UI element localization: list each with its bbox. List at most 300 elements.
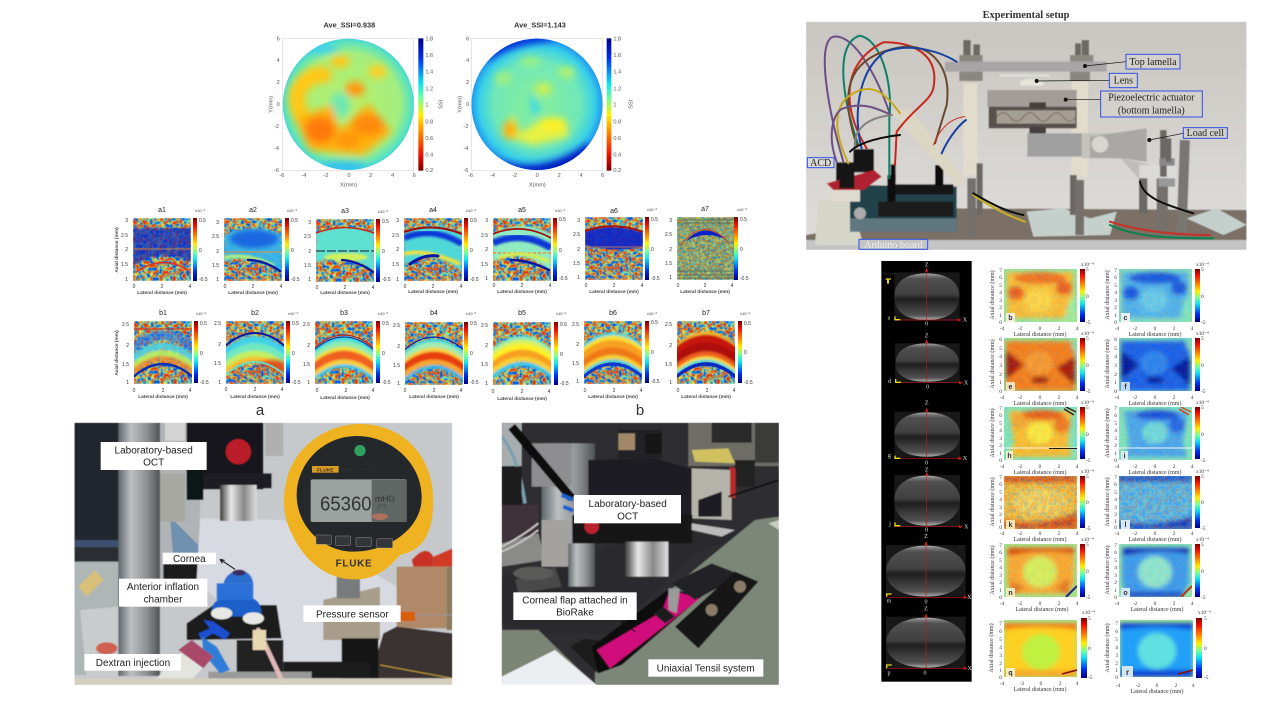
chart: strain map h: 2 xyxy=(1058,464,1061,470)
chart: strain map l: 4 xyxy=(1191,531,1194,537)
chart: b3 strain map: x10⁻³ xyxy=(378,311,389,316)
chart: strain map b: 1 xyxy=(999,313,1002,319)
chart: strain map i: 2 xyxy=(1114,443,1117,449)
chart: a1 strain map: 1 xyxy=(125,277,128,283)
chart: strain map n: 2 xyxy=(999,580,1002,586)
chart: a6 strain map: 0 xyxy=(585,283,588,289)
chart: a3 strain map: 2 xyxy=(344,285,347,291)
chart: strain map r: 4 xyxy=(1115,645,1118,651)
chart: a7 strain map: 0 xyxy=(740,247,743,253)
axis labels: left SSI: -4 xyxy=(274,146,279,152)
callout: Anterior inflation chamber: Anterior inflation xyxy=(127,582,199,593)
chart: strain map e: 1 xyxy=(999,380,1002,386)
chart: strain map i: 0 xyxy=(1114,458,1117,464)
chart: strain map h: 6 xyxy=(999,413,1002,419)
chart: a6 strain map: 0 xyxy=(651,247,654,253)
axis labels: right SSI: -2 xyxy=(512,173,517,179)
chart: b7 strain map: x10⁻³ xyxy=(740,311,751,316)
callout: Corneal flap attached in BioRake: Corneal flap attached in xyxy=(522,596,628,607)
chart: strain map k: 4 xyxy=(1076,531,1079,537)
chart: strain map i: 7 xyxy=(1114,406,1117,412)
chart: b6 strain map: b6 xyxy=(609,310,617,317)
icon: gauge: ENTER xyxy=(379,542,391,546)
chart: strain map f: 0 xyxy=(1154,395,1157,401)
arrow: corneal flap pointer xyxy=(621,621,635,632)
chart: b1 strain map: Axial distance (mm) xyxy=(114,330,120,376)
chart: b3 strain map: 4 xyxy=(372,388,375,394)
image: OCT m: 0 xyxy=(924,599,927,605)
chart: strain map q: 0 xyxy=(1088,646,1091,652)
chart: strain map o xyxy=(1104,537,1209,613)
arrow: cornea pointer xyxy=(220,559,235,569)
axis labels: left SSI: 2 xyxy=(277,80,280,86)
chart: b7 strain map: 2 xyxy=(669,343,672,349)
axis labels: right SSI: 0.2 xyxy=(613,168,621,174)
chart: a5 strain map: -0.5 xyxy=(559,276,568,282)
callout: Dextran injection xyxy=(84,654,181,671)
chart: a3 strain map: 2 xyxy=(308,249,311,255)
axis labels: right SSI: -4 xyxy=(490,173,495,179)
callout: ACD: ACD xyxy=(810,158,831,169)
chart: strain map l: Axial distance (mm) xyxy=(1104,477,1111,527)
chart: b7 strain map: 2 xyxy=(706,388,709,394)
axis labels: right SSI: 0 xyxy=(466,102,469,108)
chart: b3 strain map: 0 xyxy=(316,388,319,394)
chart: strain map l: 0 xyxy=(1114,525,1117,531)
chart: a3 strain map: 2.5 xyxy=(304,234,311,240)
chart: strain map r xyxy=(1104,610,1211,695)
chart: right SSI map xyxy=(471,38,603,171)
chart: strain map f: 0 xyxy=(1114,389,1117,395)
chart: a1 strain map: 0 xyxy=(133,284,136,290)
callout: Uniaxial Tensil system: Uniaxial Tensil system xyxy=(657,664,755,675)
chart: strain map n: 4 xyxy=(999,565,1002,571)
chart: b1 strain map: 1 xyxy=(126,380,129,386)
image: OCT d: X xyxy=(964,380,969,386)
chart: strain map c: 6 xyxy=(1114,275,1117,281)
image: OCT j: 0 xyxy=(925,528,928,534)
chart: strain map f: 0 xyxy=(1201,363,1204,369)
chart: strain map f: 6 xyxy=(1114,337,1117,343)
axis labels: left SSI: -2 xyxy=(274,124,279,130)
chart: a6 strain map: 4 xyxy=(641,283,644,289)
chart: strain map b: 7 xyxy=(999,268,1002,274)
chart: a5 strain map: 2 xyxy=(485,247,488,253)
chart: strain map b: -4 xyxy=(1000,326,1005,332)
chart: strain map o: 1 xyxy=(1114,588,1117,594)
chart: strain map o: 4 xyxy=(1114,565,1117,571)
chart: strain map i: 2 xyxy=(1173,464,1176,470)
image: OCT a: X xyxy=(963,317,968,323)
image: OCT g: g xyxy=(888,453,891,459)
chart: a1 strain map: Axial distance (mm) xyxy=(114,227,120,273)
chart: b5 strain map: Lateral distance (mm) xyxy=(497,396,547,402)
chart: strain map i: -2 xyxy=(1133,464,1138,470)
icon: gauge xyxy=(284,424,433,579)
chart: strain map r: -5 xyxy=(1204,675,1209,681)
chart: a2 strain map xyxy=(212,207,300,296)
axis labels: right SSI: 6 xyxy=(466,36,469,42)
chart: strain map f: 4 xyxy=(1114,354,1117,360)
axis labels: right SSI: 1.2 xyxy=(613,86,621,92)
axis labels: left SSI: X(mm) xyxy=(340,182,357,188)
chart: strain map c: 2 xyxy=(1173,326,1176,332)
chart: strain map c: 2 xyxy=(1114,305,1117,311)
image: OCT m: X xyxy=(967,595,972,601)
chart: b7 strain map: Lateral distance (mm) xyxy=(681,394,731,400)
callout: Piezoelectric actuator: (bottom lamella) xyxy=(1118,105,1185,116)
callout: Anterior inflation chamber xyxy=(119,579,207,607)
callout: Dextran injection: Dextran injection xyxy=(96,658,170,669)
chart: b4 strain map: -0.5 xyxy=(470,380,479,386)
icon: gauge: FLUKE xyxy=(336,559,372,570)
chart: b3 strain map: 1.5 xyxy=(303,362,310,368)
chart: b1 strain map xyxy=(114,310,209,400)
chart: a4 strain map: 0 xyxy=(404,284,407,290)
chart: a1 strain map: 2.5 xyxy=(121,233,128,239)
chart: a3 strain map: 0.5 xyxy=(382,219,389,225)
callout: Lens: Lens xyxy=(1114,76,1133,87)
chart: strain map b: Axial distance (mm) xyxy=(989,270,996,320)
chart: strain map c: 5 xyxy=(1201,267,1204,273)
chart: b7 strain map xyxy=(665,310,753,400)
chart: strain map q: 3 xyxy=(999,653,1002,659)
chart: b2 strain map: -0.5 xyxy=(292,380,301,386)
chart: strain map l: 2 xyxy=(1173,531,1176,537)
chart: strain map c: 3 xyxy=(1114,298,1117,304)
chart: strain map r: 0 xyxy=(1204,646,1207,652)
image: OCT p: 0 xyxy=(923,670,926,676)
chart: strain map r: 5 xyxy=(1204,616,1207,622)
chart: strain map f: -4 xyxy=(1115,395,1120,401)
chart: strain map o: Lateral distance (mm) xyxy=(1131,606,1183,613)
chart: strain map i: i xyxy=(1124,453,1126,460)
chart: strain map e: x10⁻⁴ xyxy=(1081,331,1094,337)
chart: a1 strain map: 4 xyxy=(189,284,192,290)
chart: b7 strain map: 2.5 xyxy=(665,322,672,328)
chart: a5 strain map: 1 xyxy=(485,276,488,282)
icon: gauge: CONFIG xyxy=(357,540,371,544)
callout: Laboratory-based OCT xyxy=(574,495,681,523)
chart: strain map b: 0 xyxy=(999,320,1002,326)
chart: strain map l: 6 xyxy=(1114,482,1117,488)
chart: a3 strain map: -0.5 xyxy=(382,277,391,283)
chart: strain map i: -5 xyxy=(1201,458,1206,464)
chart: a2 strain map: 1.5 xyxy=(212,263,219,269)
chart: a4 strain map: 3 xyxy=(396,218,399,224)
chart: strain map n: x10⁻⁴ xyxy=(1081,537,1094,543)
chart: a7 strain map: -0.5 xyxy=(740,276,749,282)
chart: a7 strain map: 0 xyxy=(677,283,680,289)
image: OCT m xyxy=(886,534,972,605)
chart: strain map c: 5 xyxy=(1114,283,1117,289)
chart: strain map h: -5 xyxy=(1086,458,1091,464)
heading: Experimental setup: Experimental setup xyxy=(983,10,1070,21)
chart: strain map f: f xyxy=(1124,384,1127,391)
chart: b6 strain map: Lateral distance (mm) xyxy=(588,394,638,400)
chart: strain map b: 2 xyxy=(1058,326,1061,332)
image: OCT g: X xyxy=(963,456,968,462)
chart: b2 strain map: x10⁻³ xyxy=(288,311,299,316)
chart: strain map n: Lateral distance (mm) xyxy=(1016,606,1068,613)
axis labels: right SSI: X(mm) xyxy=(529,182,546,188)
chart: strain map o: 5 xyxy=(1114,558,1117,564)
chart: strain map r: 7 xyxy=(1115,621,1118,627)
chart: b3 strain map: Lateral distance (mm) xyxy=(320,395,370,401)
chart: strain map k: 0 xyxy=(999,525,1002,531)
chart: strain map n: 7 xyxy=(999,543,1002,549)
chart: strain map b: 5 xyxy=(999,283,1002,289)
chart: strain map r: 3 xyxy=(1115,653,1118,659)
chart: strain map r: 6 xyxy=(1115,629,1118,635)
chart: strain map i: 0 xyxy=(1154,464,1157,470)
chart: strain map o: -4 xyxy=(1115,601,1120,607)
heading: left SSI average: Ave_SSI=0.938 xyxy=(323,21,375,30)
chart: strain map f: 5 xyxy=(1201,336,1204,342)
icon: jumper wires xyxy=(825,36,1213,238)
axis labels: left SSI: 0 xyxy=(347,173,350,179)
chart: strain map k: 3 xyxy=(999,505,1002,511)
chart: strain map b: Lateral distance (mm) xyxy=(1014,331,1066,338)
chart: strain map l: 5 xyxy=(1201,474,1204,480)
chart: strain map f: -2 xyxy=(1133,395,1138,401)
image: OCT p: X xyxy=(968,666,973,672)
chart: strain map i: 5 xyxy=(1201,405,1204,411)
chart: b5 strain map xyxy=(481,310,569,402)
axis labels: right SSI: 6 xyxy=(601,173,604,179)
chart: a7 strain map: 2.5 xyxy=(665,232,672,238)
axis labels: left SSI xyxy=(268,36,444,188)
axis labels: left SSI: 4 xyxy=(391,173,394,179)
chart: strain map q: 1 xyxy=(999,668,1002,674)
chart: b1 strain map: 0 xyxy=(133,388,136,394)
chart: a5 strain map: 0 xyxy=(559,248,562,254)
image: OCT j: j xyxy=(888,522,891,528)
chart: b1 strain map: b1 xyxy=(159,310,167,317)
chart: strain map b: 0 xyxy=(1039,326,1042,332)
chart: a6 strain map: 3 xyxy=(577,218,580,224)
chart: strain map c: 0 xyxy=(1154,326,1157,332)
chart: strain map c: 7 xyxy=(1114,268,1117,274)
chart: strain map b xyxy=(989,262,1094,338)
chart: strain map q: 4 xyxy=(1076,681,1079,687)
chart: strain map l: 0 xyxy=(1201,500,1204,506)
axis labels: left SSI: 0.2 xyxy=(425,168,433,174)
axis labels: left SSI: -6 xyxy=(274,168,279,174)
chart: strain map o: o xyxy=(1123,590,1128,597)
chart: strain map q: 0 xyxy=(999,675,1002,681)
chart: strain map l: -2 xyxy=(1133,531,1138,537)
chart: strain map q: 0 xyxy=(1040,681,1043,687)
chart: b1 strain map: -0.5 xyxy=(200,380,209,386)
callout: Uniaxial Tensil system xyxy=(648,659,763,677)
axis labels: left SSI: 4 xyxy=(277,58,280,64)
callout: Corneal flap attached in BioRake: BioRake xyxy=(556,608,594,619)
chart: a3 strain map: x10⁻³ xyxy=(378,209,389,214)
chart: strain map l: -5 xyxy=(1201,526,1206,532)
chart: strain map k: 2 xyxy=(1058,531,1061,537)
chart: strain map e xyxy=(989,331,1094,407)
chart: strain map h: 5 xyxy=(999,421,1002,427)
chart: strain map e: -2 xyxy=(1018,395,1023,401)
axis labels: left SSI: 1 xyxy=(425,103,428,109)
chart: b3 strain map: 2 xyxy=(345,388,348,394)
chart: strain map c: -4 xyxy=(1115,326,1120,332)
axis labels: left SSI: 0 xyxy=(277,102,280,108)
chart: a6 strain map: 1 xyxy=(577,275,580,281)
image: OCT j xyxy=(888,468,969,534)
chart: strain map h: 0 xyxy=(999,458,1002,464)
chart: strain map b: 5 xyxy=(1086,267,1089,273)
chart: strain map l: x10⁻⁴ xyxy=(1196,469,1209,475)
chart: b3 strain map: 0 xyxy=(382,351,385,357)
chart: strain map q: 6 xyxy=(999,629,1002,635)
chart: a5 strain map: 0.5 xyxy=(559,217,566,223)
chart: a6 strain map: -0.5 xyxy=(651,276,660,282)
chart: strain map o: 3 xyxy=(1114,573,1117,579)
chart: a1 strain map: -0.5 xyxy=(199,277,208,283)
chart: a6 strain map: Lateral distance (mm) xyxy=(589,289,639,295)
chart: b4 strain map: 4 xyxy=(460,388,463,394)
chart: b6 strain map: 1.5 xyxy=(572,361,579,367)
chart: b7 strain map: 4 xyxy=(733,388,736,394)
axis labels: right SSI: 4 xyxy=(466,58,469,64)
chart: a1 strain map: 3 xyxy=(125,218,128,224)
chart: b2 strain map: 4 xyxy=(281,387,284,393)
chart: a4 strain map: 4 xyxy=(460,284,463,290)
chart: a1 strain map: 0.5 xyxy=(199,218,206,224)
chart: a6 strain map: 2 xyxy=(577,247,580,253)
chart: strain map e: 3 xyxy=(999,363,1002,369)
chart: strain map b: 4 xyxy=(1076,326,1079,332)
callout: Laboratory-based OCT: OCT xyxy=(617,511,638,522)
axis labels: left SSI: 2 xyxy=(369,173,372,179)
chart: b2 strain map: b2 xyxy=(251,310,259,317)
image: OCT p: Z xyxy=(924,606,928,612)
chart: b5 strain map: 0 xyxy=(492,389,495,395)
chart: a5 strain map: a5 xyxy=(518,207,526,214)
chart: strain map e: -4 xyxy=(1000,395,1005,401)
chart: strain map b: -2 xyxy=(1018,326,1023,332)
chart: a7 strain map: 1 xyxy=(669,275,672,281)
chart: strain map q: 5 xyxy=(1088,616,1091,622)
callout: Laboratory-based OCT xyxy=(101,442,207,470)
chart: b1 strain map: 0.5 xyxy=(200,321,207,327)
chart: b2 strain map: 0.5 xyxy=(292,321,299,327)
chart: a2 strain map: 1 xyxy=(216,277,219,283)
chart: a7 strain map xyxy=(665,206,749,295)
chart: b2 strain map: 1.5 xyxy=(214,361,221,367)
chart: strain map b: 0 xyxy=(1086,294,1089,300)
chart: b7 strain map: 1.5 xyxy=(665,362,672,368)
chart: strain map q: 7 xyxy=(999,621,1002,627)
chart: a6 strain map: a6 xyxy=(610,208,618,215)
chart: a2 strain map: 3 xyxy=(216,220,219,226)
chart: b5 strain map: 2 xyxy=(521,389,524,395)
image: OCT p: p xyxy=(887,670,890,676)
image: OCT p xyxy=(886,606,973,676)
chart: strain map o: 7 xyxy=(1114,543,1117,549)
chart: strain map c: 4 xyxy=(1114,290,1117,296)
axis labels: right SSI: 2 xyxy=(558,173,561,179)
axis labels: left SSI: 6 xyxy=(277,36,280,42)
chart: strain map e: -5 xyxy=(1086,389,1091,395)
chart: strain map c: c xyxy=(1124,315,1128,322)
chart: a4 strain map: 2.5 xyxy=(392,233,399,239)
chart: a2 strain map: Lateral distance (mm) xyxy=(228,290,278,296)
panel: OCT lens images column xyxy=(881,261,973,682)
chart: strain map l: 0 xyxy=(1154,531,1157,537)
icon: gauge: MIN xyxy=(340,539,347,543)
callout: Laboratory-based OCT: Laboratory-based xyxy=(115,446,193,457)
chart: strain map k: Axial distance (mm) xyxy=(989,477,996,527)
image: OCT d: d xyxy=(888,379,891,385)
chart: strain map c: 1 xyxy=(1114,313,1117,319)
caption: b: b xyxy=(636,402,644,419)
chart: a4 strain map xyxy=(392,207,479,295)
chart: b5 strain map: 1 xyxy=(485,381,488,387)
chart: strain map l: 7 xyxy=(1114,475,1117,481)
chart: b7 strain map: 0.5 xyxy=(744,321,751,327)
chart: a6 strain map: 1.5 xyxy=(573,261,580,267)
chart: strain map c: Axial distance (mm) xyxy=(1104,270,1111,320)
photo scene: stretcher rig xyxy=(806,22,1247,250)
chart: a5 strain map: 1.5 xyxy=(481,262,488,268)
image: OCT a: Z xyxy=(925,263,929,269)
chart: strain map c: -2 xyxy=(1133,326,1138,332)
chart: a7 strain map: 1.5 xyxy=(665,261,672,267)
chart: strain map r: x10⁻⁴ xyxy=(1198,610,1211,616)
axis labels: right SSI: -6 xyxy=(463,168,468,174)
chart: strain map l: 1 xyxy=(1114,519,1117,525)
chart: strain map i xyxy=(1104,400,1209,476)
chart: strain map r: 0 xyxy=(1156,683,1159,689)
chart: strain map k: 2 xyxy=(999,512,1002,518)
chart: strain map l: 5 xyxy=(1114,490,1117,496)
chart: strain map n: 4 xyxy=(1076,601,1079,607)
chart: a4 strain map: 1.5 xyxy=(392,262,399,268)
image: OCT a: a xyxy=(888,316,891,322)
chart: strain map h: -2 xyxy=(1018,464,1023,470)
chart: a7 strain map: a7 xyxy=(701,206,709,213)
chart: strain map i: 4 xyxy=(1191,464,1194,470)
chart: strain map k: 7 xyxy=(999,475,1002,481)
chart: strain map k: 5 xyxy=(999,490,1002,496)
chart: strain map r: 0 xyxy=(1115,675,1118,681)
chart: b6 strain map: 2 xyxy=(613,388,616,394)
axis labels: right SSI: 1 xyxy=(613,103,616,109)
chart: b1 strain map: 4 xyxy=(189,388,192,394)
chart: strain map l: 3 xyxy=(1114,505,1117,511)
chart: a4 strain map: x10⁻³ xyxy=(466,208,477,213)
chart: a5 strain map xyxy=(481,207,568,295)
callout: Pressure sensor xyxy=(303,605,401,622)
axis labels: left SSI: Y(mm) xyxy=(268,96,274,113)
chart: a1 strain map: 1.5 xyxy=(121,262,128,268)
chart: strain map r: 2 xyxy=(1175,683,1178,689)
chart: a6 strain map: 2 xyxy=(613,283,616,289)
callout: Arduino board: Arduino board xyxy=(864,240,923,251)
chart: strain map e: e xyxy=(1009,384,1013,391)
chart: a5 strain map: 0 xyxy=(493,283,496,289)
chart: strain map r: 1 xyxy=(1115,668,1118,674)
axis labels: left SSI: -6 xyxy=(279,173,284,179)
chart: b4 strain map: 0 xyxy=(404,388,407,394)
chart: strain map h: 0 xyxy=(1039,464,1042,470)
axis labels: right SSI: 1.4 xyxy=(613,70,621,76)
axis labels: left SSI: 1.4 xyxy=(425,70,433,76)
chart: strain map h xyxy=(989,400,1094,476)
